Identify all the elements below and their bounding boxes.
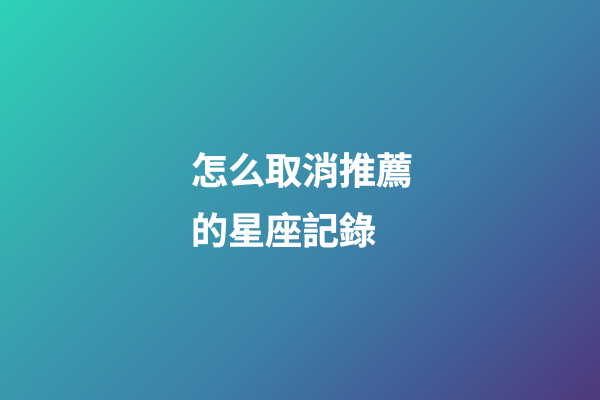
title line 2: 的星座記錄 <box>191 211 376 252</box>
title <box>191 151 413 252</box>
title line 1: 怎么取消推薦 <box>191 151 413 192</box>
